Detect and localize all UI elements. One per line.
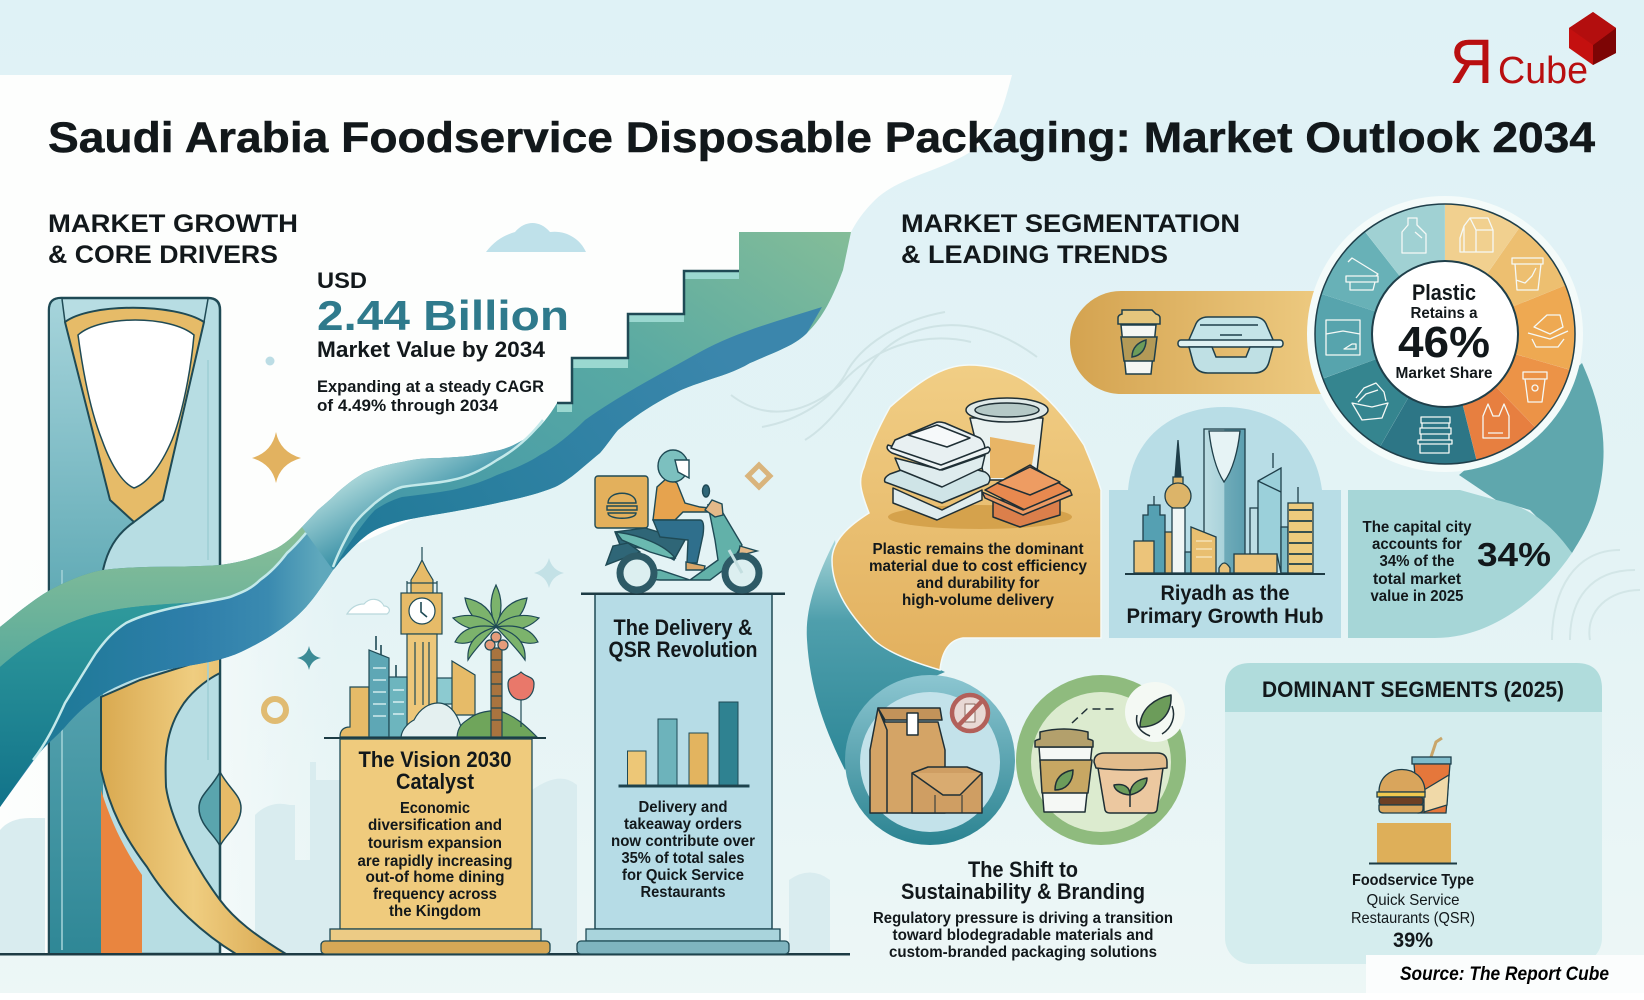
pillar text: Restaurants [640,884,726,901]
heading: market growth: & CORE DRIVERS [48,241,278,269]
Riyadh skyline illustration [1125,429,1325,575]
pillar heading: The Vision 2030 [358,747,512,772]
segment text: 39% [1393,929,1433,952]
stat: 34 percent: 34% [1477,536,1551,573]
left teal swoosh [807,540,945,770]
icon: clamshell box [1178,317,1283,373]
capital city text: accounts for [1372,536,1462,553]
donut line icons [1326,218,1568,453]
panel: dominant segments: DOMINANT SEGMENTS (2025) [1262,677,1564,702]
pillar text [358,800,512,920]
capital city text: value in 2025 [1370,588,1464,605]
market value stat: USD [317,268,367,293]
capital city text: 34% of the [1380,553,1455,570]
logo: RCube: Я [1450,28,1493,97]
pillar text [611,799,755,901]
capital city text: The capital city [1362,519,1472,536]
icon: burger and drink [1377,738,1451,813]
right teal swoosh [1459,363,1604,553]
sustainability text: custom-branded packaging solutions [889,944,1157,961]
pillar: Vision 2030 catalyst [321,739,550,954]
panel: dominant segments [1225,663,1602,964]
Vision 2030 skyline illustration [324,547,546,739]
market value stat: of 4.49% through 2034 [317,396,499,415]
panel: plastic blob [832,365,1101,670]
capital city text [1362,519,1472,605]
heading: market segmentation: MARKET SEGMENTATION [901,210,1240,238]
Riyadh heading [1126,582,1324,628]
icon: diamond [748,465,770,487]
title: Saudi Arabia Foodservice Disposable Packaging: Market Outlook 2034 [48,114,1595,162]
faint background skyline [0,762,830,954]
pillar text: are rapidly increasing [358,853,512,870]
pillar text: diversification and [368,817,502,834]
plastic text: Plastic remains the dominant [872,541,1084,558]
icon: coffee cup [1118,310,1160,374]
ground line [0,953,850,956]
market value stat: Expanding at a steady CAGR [317,377,544,396]
pillar text: the Kingdom [389,903,481,920]
donut centre text: Market Share [1396,365,1493,382]
Riyadh heading: Primary Growth Hub [1126,605,1324,628]
icon: pale sparkle [534,558,564,588]
Kingdom Tower illustration [49,298,286,954]
bottom white strip [0,993,1644,1000]
donut chart: plastic 46 percent [1301,190,1589,478]
market value stat: 2.44 Billion [317,292,569,339]
pillar text: for Quick Service [622,867,744,884]
icon: cloud [486,223,586,252]
pillar text: Economic [400,800,470,817]
sustainability text: toward blodegradable materials and [892,927,1154,944]
pillar text: now contribute over [611,833,755,850]
segment text: Quick Service [1366,892,1460,909]
capital city text: total market [1373,571,1462,588]
icon: delivery scooter rider [595,450,759,590]
pillar text: out-of home dining [366,869,504,886]
growth ribbon with stairs [0,232,851,807]
heading: market segmentation: & LEADING TRENDS [901,241,1168,269]
source patch [1366,955,1644,993]
segment text [1351,872,1475,952]
sustainability illustration: paper bag circle [845,675,1015,845]
bar chart [619,702,749,787]
sustainability text: The Shift to [968,857,1078,882]
pillar text: tourism expansion [368,835,502,852]
bar: quick service share [1377,823,1451,863]
donut centre text: Plastic [1412,280,1476,305]
pillar: Delivery and QSR revolution [577,592,789,954]
segment text: Foodservice Type [1352,872,1474,889]
icon: leaf ornament [199,772,241,846]
heading: market growth [48,210,298,269]
icon: teal sparkle [297,646,321,670]
sustainability text [873,857,1173,961]
panel: capital city 34 percent [1348,490,1572,638]
source label: Source: The Report Cube [1400,964,1609,985]
icon: gold ring [264,699,286,721]
pillar text: takeaway orders [624,816,742,833]
decorative dot [266,356,274,366]
Riyadh heading: Riyadh as the [1160,582,1290,605]
pillar heading [358,747,512,794]
heading: market growth: MARKET GROWTH [48,210,298,238]
sustainability text: Regulatory pressure is driving a transition [873,910,1173,927]
donut centre text [1396,280,1493,382]
heading: market segmentation [901,210,1240,269]
plastic containers illustration [885,398,1072,529]
pillar text: frequency across [373,886,497,903]
pillar heading: The Delivery & [614,615,753,640]
icon: small cloud outline [347,599,389,614]
donut centre text: Retains a [1410,305,1478,322]
white header panel [0,75,1012,700]
donut centre text: 46% [1398,318,1490,367]
segment text: Restaurants (QSR) [1351,910,1475,927]
pillar heading [608,615,758,662]
gold pill with packaging icons [1070,291,1340,394]
logo: RCube [1450,12,1616,97]
plastic text: material due to cost efficiency [869,558,1087,575]
pillar heading: Catalyst [396,769,475,794]
plastic text [869,541,1087,609]
market value stat [317,268,569,415]
plastic text: high-volume delivery [902,592,1054,609]
panel: Riyadh growth hub [1109,407,1341,638]
pillar text: Delivery and [638,799,728,816]
market value stat: Market Value by 2034 [317,337,546,362]
logo: RCube: Cube [1498,50,1588,92]
pillar heading: QSR Revolution [608,637,758,662]
icon: gold sparkle [252,432,301,483]
pillar text: 35% of total sales [622,850,745,867]
plastic text: and durability for [916,575,1040,592]
sustainability illustration: compostable cup circle [1016,675,1186,845]
sustainability text: Sustainability & Branding [901,879,1145,904]
